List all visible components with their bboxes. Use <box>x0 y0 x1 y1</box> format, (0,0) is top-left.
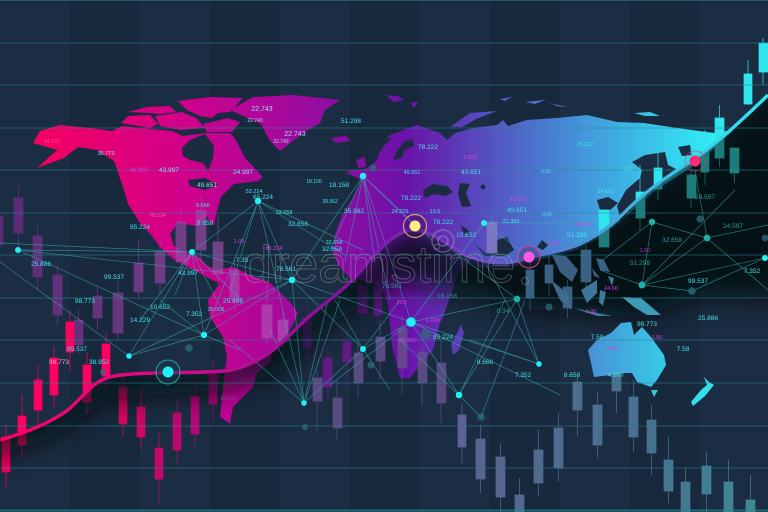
number labels: magenta: 49.651 <box>510 197 526 203</box>
number labels: light blue on land: 24.997 <box>233 169 253 176</box>
number labels: cyan: 25.886 <box>31 261 51 268</box>
Baltic Sea <box>393 139 414 160</box>
number labels: magenta: 1.50 <box>652 335 662 341</box>
number labels: magenta: 85.224 <box>266 246 282 252</box>
candlesticks: dark teal below the curve <box>598 138 740 248</box>
number labels: cyan: 89.537 <box>67 346 87 353</box>
number labels: cyan <box>31 118 761 402</box>
number labels: cyan: 53.224 <box>246 189 262 195</box>
number labels: light blue on land: 22.743 <box>251 106 273 113</box>
Bay of Bengal <box>474 237 514 256</box>
Great Lakes <box>188 178 218 190</box>
Sumatra <box>551 280 571 310</box>
number labels: light blue on land <box>98 106 306 219</box>
number labels: cyan: 78.222 <box>418 144 438 151</box>
number labels: cyan: 32.658 <box>276 210 292 216</box>
number labels: cyan: 34. <box>662 167 672 174</box>
map: Eurasia and Africa <box>333 115 734 378</box>
number labels: cyan: 0.06 <box>542 212 552 218</box>
number labels: cyan: 78.222 <box>433 219 453 226</box>
map: UK <box>356 157 366 168</box>
number labels: cyan: 43.651 <box>461 169 481 176</box>
candlesticks: lower magenta row <box>119 360 217 503</box>
Papua <box>622 297 661 315</box>
Black Sea <box>423 184 453 198</box>
number labels: magenta <box>44 139 662 352</box>
candlesticks: faded upper row <box>0 185 288 355</box>
number labels: cyan: 99.537 <box>104 274 124 281</box>
number labels: magenta: 25.6 <box>397 300 407 306</box>
number labels: cyan: 32.658 <box>326 240 342 246</box>
North Sea <box>369 138 392 160</box>
number labels: cyan: 32.658 <box>662 237 682 244</box>
candlesticks: upper row in Asia region <box>526 245 591 318</box>
Hudson Bay <box>182 134 214 171</box>
New Zealand <box>691 377 714 406</box>
dark seas on the map <box>182 134 692 256</box>
number labels: cyan: 14.229 <box>130 317 150 324</box>
number labels: cyan: 51.298 <box>341 118 361 125</box>
Tasmania <box>651 390 658 397</box>
number labels: magenta: 1.00 <box>586 309 596 315</box>
number labels: cyan: 32.658 <box>322 246 342 253</box>
Persian Gulf <box>460 225 471 237</box>
number labels: cyan: 8.658 <box>197 220 214 227</box>
number labels: cyan: 0.06 <box>541 169 551 175</box>
number labels: cyan: 32.658 <box>288 221 308 228</box>
number labels: magenta: 24.597 <box>44 139 60 145</box>
number labels: cyan: 98.773 <box>637 321 657 328</box>
number labels: magenta: 1.000 <box>426 318 440 324</box>
number labels: cyan: 25.006 <box>208 307 224 313</box>
number labels: cyan: 18.156 <box>306 179 322 185</box>
map: Arctic islands <box>121 97 243 132</box>
Australia and Pacific islands <box>551 255 714 406</box>
number labels: cyan: 99.537 <box>688 278 708 285</box>
node: cyan <box>156 360 180 384</box>
map: Greenland <box>230 95 340 151</box>
Yellow Sea <box>597 197 618 210</box>
map: South America <box>208 267 298 428</box>
Borneo <box>581 280 597 303</box>
candlesticks: bright pink row <box>2 310 110 487</box>
number labels: cyan: 51.298 <box>567 232 587 239</box>
number labels: cyan: 49.651 <box>507 207 527 214</box>
number labels: cyan: 7.58 <box>677 346 690 353</box>
number labels: magenta: 43.997 <box>130 168 149 174</box>
node: pink <box>518 246 540 268</box>
candlesticks: slate to teal lower right row <box>458 350 755 512</box>
node: yellow <box>404 214 426 238</box>
number labels: cyan: 25.886 <box>223 298 243 305</box>
number labels: cyan: 7.352 <box>515 372 532 379</box>
number labels: cyan: 98.773 <box>49 359 69 366</box>
shadow below the growth curve <box>0 70 768 462</box>
map: North America <box>33 125 263 283</box>
number labels: magenta: 1.00 <box>607 346 617 352</box>
candlesticks: lilac middle row <box>313 315 446 440</box>
number labels: cyan: 89.537 <box>221 396 237 402</box>
number labels: cyan: 8.666 <box>196 203 210 209</box>
number labels: cyan: 38.952 <box>89 359 109 366</box>
East Siberian bay <box>678 145 692 156</box>
number labels: magenta: 1.06 <box>549 241 559 247</box>
number labels: magenta: 24.66 <box>604 286 618 292</box>
number labels: cyan: 7.352 <box>744 268 761 275</box>
number labels: light blue on land: 22.743 <box>273 139 289 145</box>
number labels: magenta: 1.00 <box>234 239 244 245</box>
number labels: cyan: 7.58 <box>591 334 604 341</box>
Australia <box>588 322 666 387</box>
number labels: cyan: 10.652 <box>150 304 170 311</box>
number labels: cyan: 35.962 <box>344 208 364 215</box>
number labels: magenta: 1.000 <box>463 155 477 161</box>
number labels: cyan: 85.224 <box>130 224 150 231</box>
number labels: cyan: 78.222 <box>401 195 421 202</box>
Indochina coast <box>537 240 548 250</box>
candlesticks: bright cyan above the curve <box>599 38 768 247</box>
number labels: cyan: 4.997 <box>608 372 625 379</box>
number labels: light blue on land: 36.773 <box>98 151 114 157</box>
number labels: cyan: 7.352 <box>186 311 203 318</box>
number labels: cyan: 25.886 <box>698 315 718 322</box>
number labels: cyan: 24.229 <box>392 209 408 215</box>
number labels: cyan: 49.651 <box>404 170 420 176</box>
number labels: cyan: 10.652 <box>456 232 476 239</box>
number labels: cyan: 18.158 <box>329 182 349 189</box>
highlighted nodes on the curve <box>156 151 705 384</box>
number labels: cyan: 18.158 <box>437 293 457 300</box>
Caspian Sea <box>458 183 471 207</box>
map: Madagascar <box>451 325 464 355</box>
number labels: cyan: 24.661 <box>598 189 614 195</box>
number labels: light blue on land: 65.224 <box>150 213 166 219</box>
growth curve line <box>0 95 768 440</box>
number labels: cyan: 24.597 <box>723 223 743 230</box>
candlesticks: purple middle row <box>303 270 382 400</box>
number labels: cyan: 98.773 <box>75 298 95 305</box>
number labels: cyan: 78.561 <box>276 266 296 273</box>
number labels: light blue on land: 43.997 <box>159 167 179 174</box>
number labels: cyan: 24.597 <box>695 194 715 201</box>
number labels: cyan: 8.658 <box>564 372 581 379</box>
number labels: cyan: 85.224 <box>433 334 453 341</box>
number labels: cyan: 7.35 <box>236 257 249 264</box>
number labels: cyan: 0.06 <box>622 167 632 173</box>
number labels: cyan: 10.5 <box>430 209 440 215</box>
number labels: cyan: 31.388 <box>503 219 519 225</box>
node: red <box>685 151 705 171</box>
number labels: light blue on land: 22.743 <box>247 118 263 124</box>
number labels: light blue on land: 49.651 <box>197 182 217 189</box>
map: Iceland and Svalbard <box>331 95 568 143</box>
Sea of Okhotsk and Sea of Japan <box>617 152 678 221</box>
number labels: magenta: 49.651 <box>575 222 591 228</box>
number labels: cyan: 8.666 <box>477 359 494 366</box>
network connection lines <box>0 170 768 417</box>
watermark: dreamstime <box>243 236 515 294</box>
number labels: light blue on land: 22.743 <box>284 131 306 138</box>
Indochina and Philippines <box>552 255 610 282</box>
number labels: cyan: 78.222 <box>577 142 593 148</box>
Java and lesser islands <box>574 276 614 316</box>
network nodes <box>15 164 768 430</box>
number labels: cyan: 78.561 <box>382 283 402 290</box>
number labels: magenta: 1.50 <box>640 248 650 254</box>
number labels: cyan: 0.34 <box>497 308 510 315</box>
number labels: magenta: 85.000 <box>399 338 415 344</box>
map: Sakhalin, Kamchatka islands <box>634 112 660 116</box>
candlesticks: pale candle on Asia <box>487 215 497 263</box>
number labels: cyan: 51.298 <box>630 260 650 267</box>
number labels: cyan: 65.224 <box>253 194 273 201</box>
number labels: cyan: 43.997 <box>178 270 198 277</box>
number labels: cyan: 39.952 <box>322 199 338 205</box>
Aral Sea <box>480 184 486 190</box>
world map <box>33 95 734 428</box>
